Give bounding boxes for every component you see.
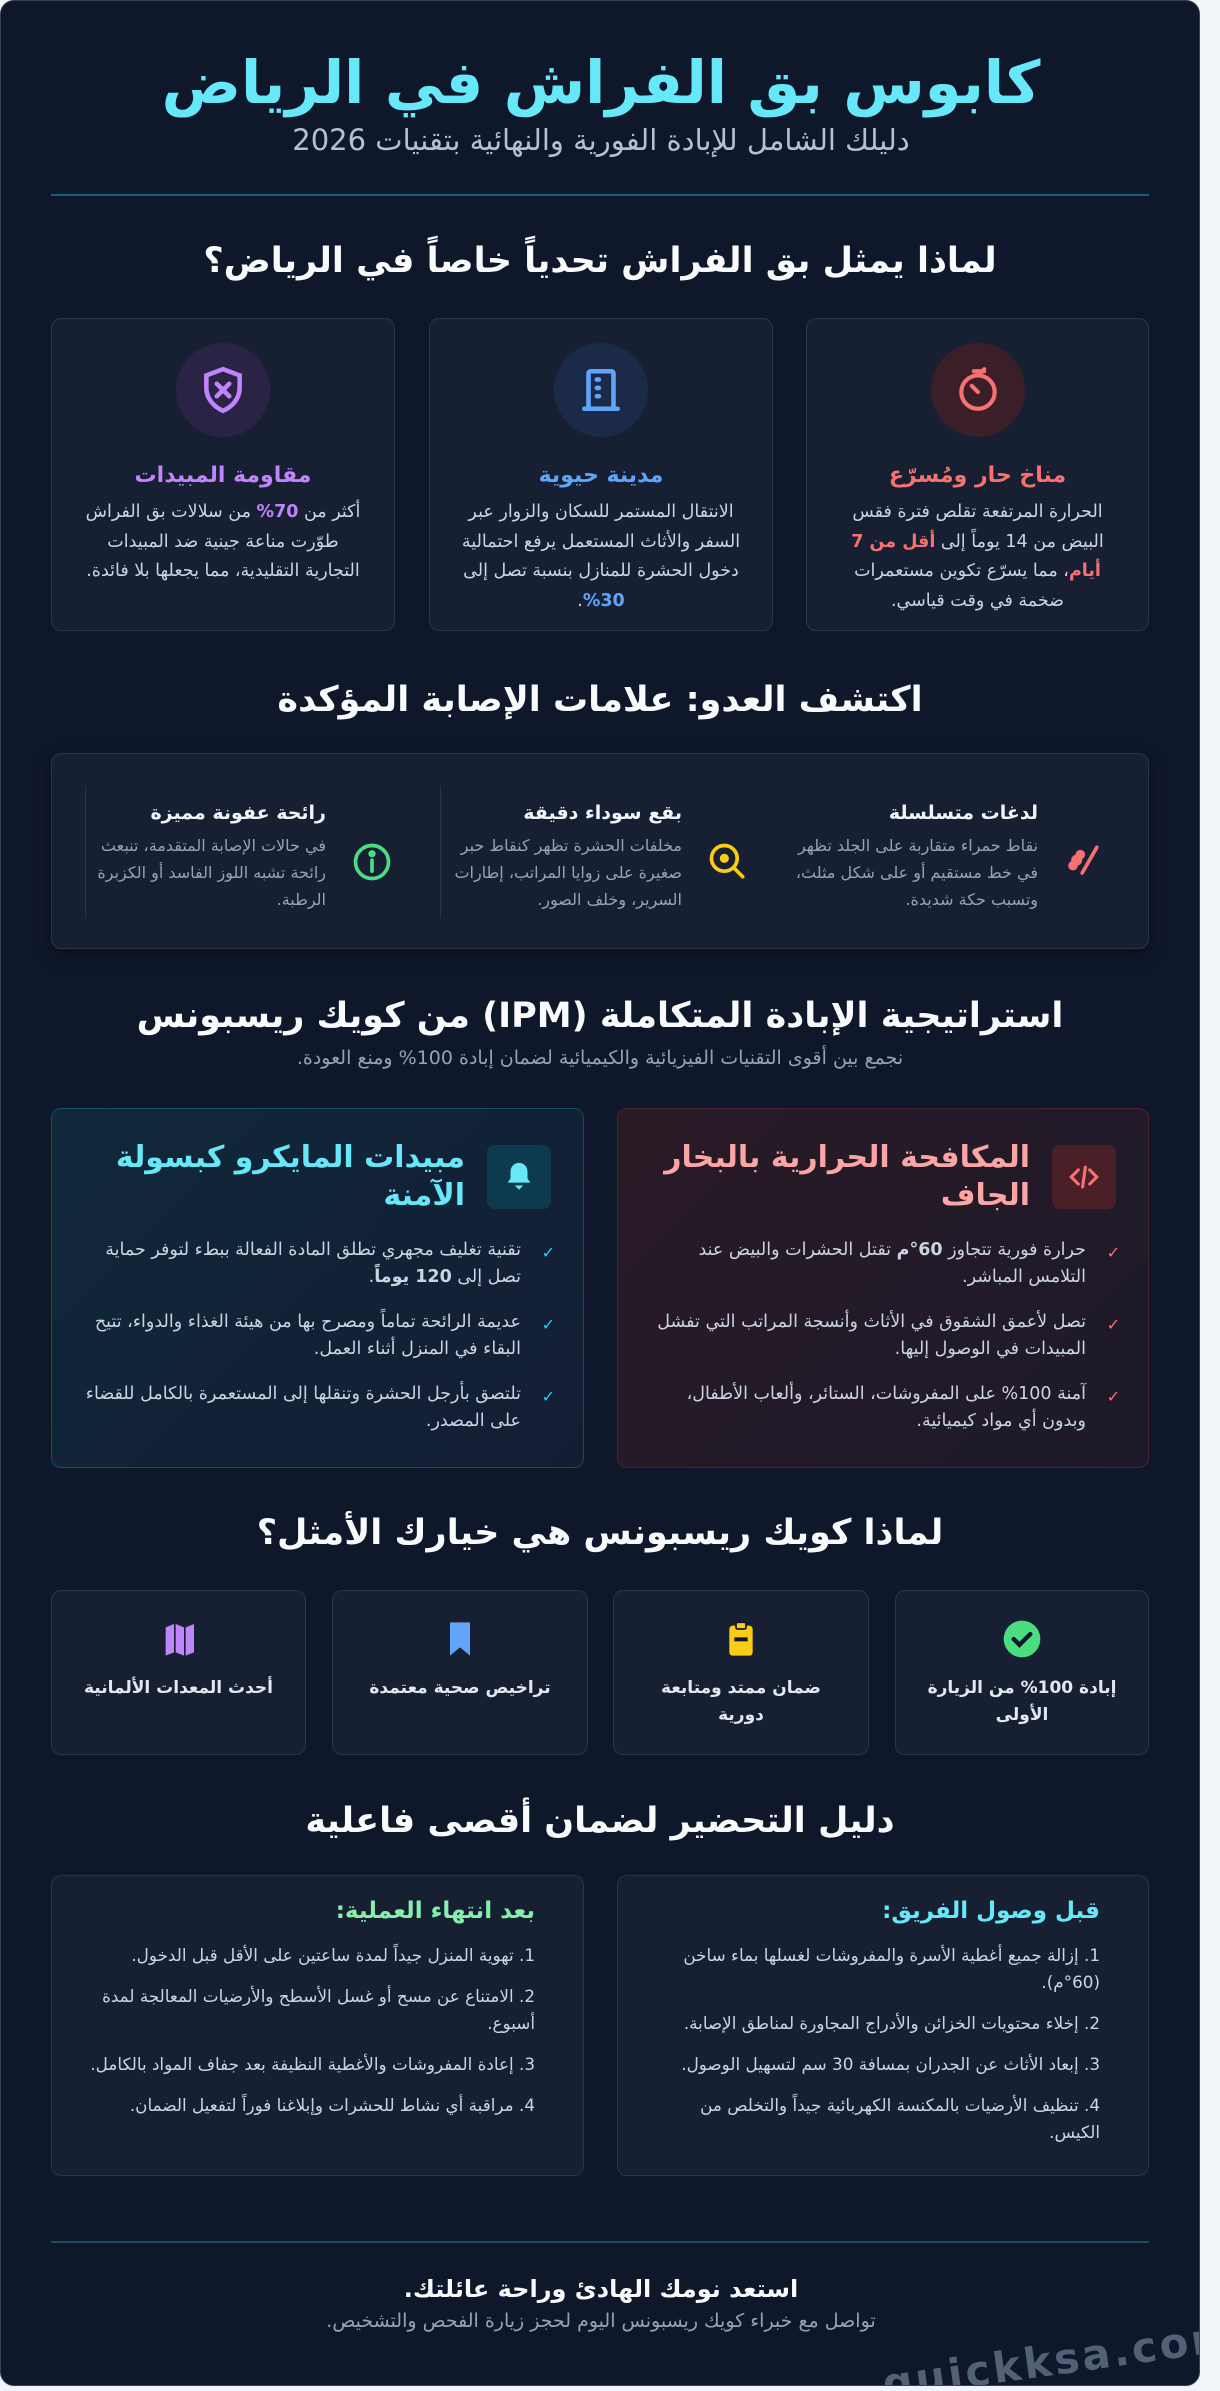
title: كابوس بق الفراش في الرياض xyxy=(162,48,1040,117)
footer subtitle: تواصل مع خبراء كويك ريسبونس اليوم لحجز زيارة الفحص والتشخيص. xyxy=(326,2310,876,2332)
panel: before arrival: 3. إبعاد الأثاث عن الجدران بمسافة 30 سم لتسهيل الوصول. xyxy=(681,2054,1100,2074)
panel: micro capsule: مبيدات المايكرو كبسولة الآمنة xyxy=(116,1140,465,1213)
panel: before arrival: 2. إخلاء محتويات الخزائن والأدراج المجاورة لمناطق الإصابة. xyxy=(684,2013,1100,2033)
panel: micro capsule xyxy=(51,1108,584,1468)
card: vibrant city xyxy=(429,318,773,631)
panel: after operation: 4. مراقبة أي نشاط للحشرات وإبلاغنا فوراً لتفعيل الضمان. xyxy=(130,2095,535,2115)
card: vibrant city: مدينة حيوية xyxy=(539,463,663,488)
card: resistance: مقاومة المبيدات xyxy=(135,463,311,488)
sign: black spots: بقع سوداء دقيقة xyxy=(523,802,682,824)
panel: dry steam: حرارة فورية تتجاوز 60°م تقتل الحشرات والبيض عند التلامس المباشر. xyxy=(698,1240,1086,1287)
sign: bites xyxy=(796,802,1099,909)
panel: after operation: 3. إعادة المفروشات والأغطية النظيفة بعد جفاف المواد بالكامل. xyxy=(90,2054,535,2074)
icon: clock xyxy=(930,343,1024,437)
panel: micro capsule: عديمة الرائحة تماماً ومصرح بها من هيئة الغذاء والدواء، تتيح البقاء في المنزل أثناء العمل. xyxy=(95,1312,521,1359)
panel: dry steam: آمنة 100% على المفروشات، الستائر، وألعاب الأطفال، وبدون أي مواد كيميائية. xyxy=(687,1384,1086,1431)
panel: dry steam: المكافحة الحرارية بالبخار الجاف xyxy=(664,1140,1030,1213)
panel: dry steam: ✓ xyxy=(1107,1243,1120,1262)
sign: smell: رائحة عفونة مميزة xyxy=(150,802,326,824)
card: equipment xyxy=(51,1590,306,1755)
icon: bell xyxy=(487,1145,551,1209)
card: warranty xyxy=(613,1590,869,1755)
heading: why us: لماذا كويك ريسبونس هي خيارك الأمثل؟ xyxy=(257,1513,943,1553)
card: hot climate: الحرارة المرتفعة تقلص فترة فقس البيض من 14 يوماً إلى أقل من 7 أيام، مما يسرّع تكوين مستعمرات ضخمة في وقت قياسي. xyxy=(851,502,1104,610)
panel: micro capsule: ✓ xyxy=(542,1315,555,1334)
panel: before arrival: 1. إزالة جميع أغطية الأسرة والمفروشات لغسلها بماء ساخن (60°م). xyxy=(683,1945,1100,1992)
panel: micro capsule: ✓ xyxy=(542,1387,555,1406)
panel: after operation: 1. تهوية المنزل جيداً لمدة ساعتين على الأقل قبل الدخول. xyxy=(131,1945,535,1965)
sign: smell xyxy=(97,802,390,909)
card: 100% xyxy=(895,1590,1149,1755)
panel: after operation: بعد انتهاء العملية: xyxy=(336,1898,535,1924)
icon: check circle xyxy=(1004,1620,1040,1658)
card: 100%: إبادة 100% من الزيارة الأولى xyxy=(928,1678,1116,1725)
card: resistance: أكثر من 70% من سلالات بق الفراش طوّرت مناعة جينية ضد المبيدات التجارية التقليدية، مما يجعلها بلا فائدة. xyxy=(86,502,360,581)
subheading: IPM: نجمع بين أقوى التقنيات الفيزيائية والكيميائية لضمان إبادة 100% ومنع العودة. xyxy=(297,1047,903,1069)
card: hot climate xyxy=(806,318,1149,631)
panel: after operation: 2. الامتناع عن مسح أو غسل الأسطح والأرضيات المعالجة لمدة أسبوع. xyxy=(102,1986,535,2033)
sign: bites: لدغات متسلسلة xyxy=(889,802,1038,824)
panel: before arrival: قبل وصول الفريق: xyxy=(882,1898,1100,1924)
heading: prep guide: دليل التحضير لضمان أقصى فاعلية xyxy=(305,1801,895,1841)
panel: before arrival xyxy=(617,1875,1149,2176)
heading: why Riyadh: لماذا يمثل بق الفراش تحدياً خاصاً في الرياض؟ xyxy=(203,241,997,281)
card: resistance xyxy=(51,318,395,631)
panel: dry steam xyxy=(617,1108,1149,1468)
sign: smell: في حالات الإصابة المتقدمة، تنبعث رائحة تشبه اللوز الفاسد أو الكزبرة الرطبة. xyxy=(97,836,326,909)
icon: building xyxy=(554,343,648,437)
card: licenses xyxy=(332,1590,588,1755)
panel: dry steam: ✓ xyxy=(1107,1387,1120,1406)
panel: micro capsule: ✓ xyxy=(542,1243,555,1262)
icon: clipboard xyxy=(729,1622,753,1656)
icon: shield xyxy=(176,343,270,437)
card: equipment: أحدث المعدات الألمانية xyxy=(84,1678,273,1698)
sign: bites: نقاط حمراء متقاربة على الجلد تظهر في خط مستقيم أو على شكل مثلث، وتسبب حكة شديدة. xyxy=(796,836,1038,909)
panel: before arrival: 4. تنظيف الأرضيات بالمكنسة الكهربائية جيداً والتخلص من الكيس. xyxy=(700,2095,1100,2142)
icon: bookmark xyxy=(450,1622,470,1656)
sign: black spots xyxy=(454,802,745,909)
card: hot climate: مناخ حار ومُسرّع xyxy=(889,463,1066,488)
card: warranty: ضمان ممتد ومتابعة دورية xyxy=(661,1678,821,1725)
subtitle: دليلك الشامل للإبادة الفورية والنهائية بتقنيات 2026 xyxy=(292,123,910,157)
heading: IPM: استراتيجية الإبادة المتكاملة (IPM) من كويك ريسبونس xyxy=(137,996,1063,1036)
card: vibrant city: الانتقال المستمر للسكان والزوار عبر السفر والأثاث المستعمل يرفع احتمالية دخول الحشرة للمنازل بنسبة تصل إلى 30%. xyxy=(462,502,740,610)
panel: after operation xyxy=(51,1875,584,2176)
icon: code xyxy=(1052,1145,1116,1209)
panel: signs xyxy=(51,753,1149,949)
icon: map xyxy=(166,1624,194,1656)
panel: micro capsule: تلتصق بأرجل الحشرة وتنقلها إلى المستعمرة بالكامل للقضاء على المصدر. xyxy=(86,1384,521,1431)
panel: dry steam: تصل لأعمق الشقوق في الأثاث وأنسجة المراتب التي تفشل المبيدات في الوصول إليها. xyxy=(657,1312,1086,1359)
sign: black spots: مخلفات الحشرة تظهر كنقاط حبر صغيرة على زوايا المراتب، إطارات السرير، وخلف الصور. xyxy=(454,836,682,909)
panel: dry steam: ✓ xyxy=(1107,1315,1120,1334)
footer title: استعد نومك الهادئ وراحة عائلتك. xyxy=(404,2275,798,2303)
heading: signs: اكتشف العدو: علامات الإصابة المؤكدة xyxy=(277,680,923,720)
panel: micro capsule: تقنية تغليف مجهري تطلق المادة الفعالة ببطء لتوفر حماية تصل إلى 120 يوماً. xyxy=(105,1240,521,1287)
card: licenses: تراخيص صحية معتمدة xyxy=(369,1678,551,1698)
